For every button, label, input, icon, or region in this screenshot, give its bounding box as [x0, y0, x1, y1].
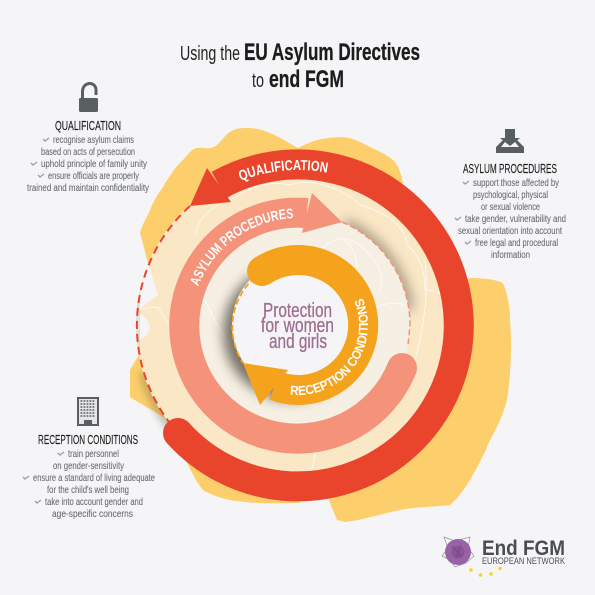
left cut-outs in disk	[136, 263, 158, 345]
asylum procedures ring arrow	[169, 193, 417, 454]
asylum procedures text block	[455, 161, 566, 261]
shadow of centre circle	[214, 270, 325, 409]
icon: open padlock	[79, 83, 98, 112]
shadow outside outer disk	[136, 369, 168, 431]
title	[180, 39, 420, 93]
beige disk	[136, 163, 460, 487]
title: EU Asylum Directives	[244, 39, 420, 66]
reception conditions text block: take into account gender and	[45, 496, 143, 508]
centre white circle	[232, 259, 364, 391]
centre text: Protection	[263, 300, 332, 322]
icon: inbox download	[496, 129, 524, 153]
reception conditions ring arrow	[243, 245, 378, 405]
yellow rose background shapes	[130, 128, 511, 522]
qualification text block: recognise asylum claims	[53, 134, 134, 146]
centre text	[261, 300, 334, 353]
qualification text block: trained and maintain confidentiality	[27, 182, 150, 194]
centre text: for women	[261, 315, 334, 337]
reception conditions text block: ensure a standard of living adequate	[33, 472, 155, 484]
qualification text block: ensure officials are properly	[48, 170, 140, 182]
shadow of middle disk	[345, 224, 408, 310]
reception conditions text block: train personnel	[68, 448, 119, 460]
qualification text block: QUALIFICATION	[55, 118, 121, 133]
centre text: and girls	[269, 331, 327, 353]
asylum procedures text block: support those affected by	[473, 177, 560, 189]
reception conditions text block: for the child's well being	[47, 484, 129, 496]
asylum procedures text block: free legal and procedural	[475, 237, 558, 249]
reception conditions ring arrow: RECEPTION CONDITIONS	[290, 298, 368, 396]
logo: End FGM European Network	[442, 537, 565, 577]
qualification text block: based on acts of persecution	[41, 146, 135, 158]
orange dashed circle edge	[232, 272, 262, 363]
rose outline strokes	[139, 182, 460, 472]
title: Using the	[180, 43, 240, 65]
inner rose strokes	[205, 239, 405, 366]
logo: End FGM European Network: EUROPEAN NETWORK	[482, 556, 565, 566]
red dashed circle edge	[137, 206, 190, 433]
asylum procedures text block: or sexual violence	[481, 201, 540, 213]
salmon dashed circle edge	[342, 222, 410, 345]
asylum procedures ring arrow: ASYLUM PROCEDURES	[190, 208, 293, 286]
qualification text block: uphold principle of family unity	[41, 158, 148, 170]
title: end FGM	[269, 66, 344, 93]
icon: building	[77, 397, 99, 426]
reception conditions text block: on gender-sensitivity	[53, 460, 125, 472]
logo: End FGM European Network: End FGM	[482, 537, 565, 560]
qualification ring arrow: QUALIFICATION	[238, 160, 328, 182]
asylum procedures text block: information	[491, 249, 530, 261]
title: to	[252, 70, 264, 92]
light inner disk	[186, 213, 410, 437]
reception conditions text block	[23, 432, 155, 520]
qualification ring arrow	[163, 149, 474, 502]
asylum procedures text block: psychological, physical	[473, 189, 548, 201]
reception conditions text block: RECEPTION CONDITIONS	[38, 432, 138, 447]
reception conditions text block: age-specific concerns	[52, 508, 133, 520]
qualification text block	[27, 118, 150, 194]
